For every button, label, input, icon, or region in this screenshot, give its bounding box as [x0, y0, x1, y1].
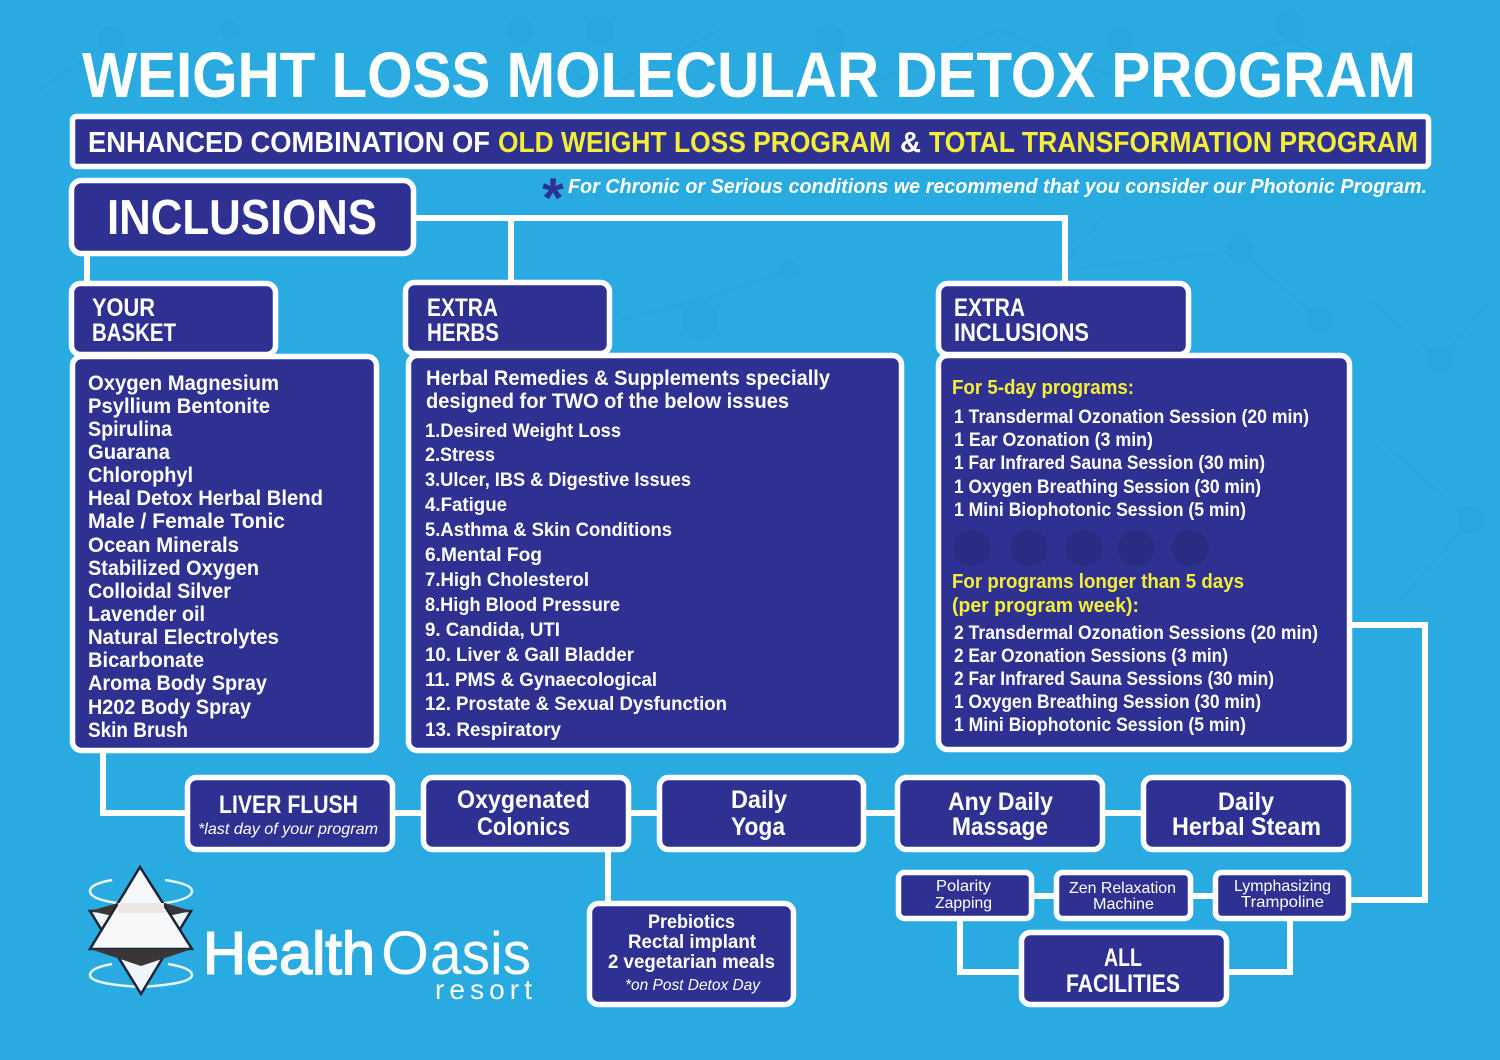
heading: extra inclusions [938, 284, 1188, 354]
panel: your basket list: Guarana [88, 441, 170, 464]
panel: extra herbs list: designed for TWO of the below issues [426, 390, 789, 413]
banner: & [900, 127, 921, 159]
box: any daily massage [898, 778, 1102, 850]
box: zen relaxation machine: Machine [1093, 896, 1154, 913]
panel: extra herbs list: 8.High Blood Pressure [425, 594, 620, 616]
box: daily yoga: Daily [731, 786, 787, 814]
box: oxygenated colonics [424, 778, 628, 850]
note: photonic program: For Chronic or Serious conditions we recommend that you consider our Photonic Program. [568, 176, 1427, 198]
heading: extra herbs: EXTRA [427, 294, 498, 322]
panel: your basket list: Skin Brush [88, 719, 188, 742]
heading: extra inclusions: INCLUSIONS [954, 319, 1089, 347]
panel: extra inclusions list: 1 Ear Ozonation (3 min) [954, 429, 1153, 451]
panel: your basket list: Male / Female Tonic [88, 510, 285, 533]
panel: extra inclusions list: For programs longer than 5 days [952, 571, 1244, 593]
box: liver flush: LIVER FLUSH [219, 791, 358, 819]
panel: your basket list: Stabilized Oxygen [88, 557, 259, 580]
panel: extra inclusions list: 2 Transdermal Ozonation Sessions (20 min) [954, 622, 1318, 644]
box: oxygenated colonics: Colonics [477, 813, 570, 841]
box: daily herbal steam: Herbal Steam [1172, 813, 1321, 841]
heading: inclusions [72, 180, 414, 254]
panel: extra inclusions list: 1 Mini Biophotonic Session (5 min) [954, 499, 1246, 521]
logo: Health Oasis resort: O [381, 919, 429, 987]
panel: extra herbs list: 1.Desired Weight Loss [425, 420, 621, 442]
box: prebiotics: Rectal implant [628, 932, 757, 953]
banner [72, 116, 1428, 166]
note: photonic program: * [542, 166, 564, 229]
note: photonic program [542, 166, 1427, 229]
box: all facilities: FACILITIES [1066, 970, 1180, 998]
panel: extra inclusions list: 1 Far Infrared Sauna Session (30 min) [954, 452, 1265, 474]
panel: extra inclusions list: 1 Transdermal Ozonation Session (20 min) [954, 406, 1309, 428]
panel: your basket list: Chlorophyl [88, 464, 193, 487]
panel: your basket list: H202 Body Spray [88, 696, 251, 719]
box: any daily massage: Any Daily [948, 788, 1053, 816]
panel: your basket list: Natural Electrolytes [88, 626, 279, 649]
panel: extra inclusions list: 1 Oxygen Breathing Session (30 min) [954, 691, 1261, 713]
icon: star logo [90, 867, 192, 994]
panel: your basket list: Lavender oil [88, 603, 205, 626]
panel: extra herbs list: 6.Mental Fog [425, 544, 542, 566]
box: daily yoga: Yoga [731, 813, 786, 841]
heading: extra herbs [406, 282, 610, 354]
panel: your basket list: Aroma Body Spray [88, 672, 267, 695]
panel: extra inclusions list: 2 Far Infrared Sauna Sessions (30 min) [954, 668, 1274, 690]
panel: extra herbs list: 12. Prostate & Sexual Dysfunction [425, 693, 727, 715]
panel: your basket list [72, 356, 376, 750]
heading: extra inclusions: EXTRA [954, 294, 1025, 322]
box: lymphasizing trampoline: Lymphasizing [1234, 878, 1331, 895]
box: liver flush: *last day of your program [198, 821, 378, 838]
panel: your basket list: Oxygen Magnesium [88, 372, 279, 395]
box: all facilities: ALL [1104, 944, 1142, 972]
box: any daily massage: Massage [952, 813, 1048, 841]
heading: extra herbs: HERBS [427, 319, 499, 347]
panel: extra inclusions list: For 5-day programs: [952, 377, 1134, 399]
box: daily herbal steam [1144, 778, 1348, 850]
banner: TOTAL TRANSFORMATION PROGRAM [929, 127, 1418, 159]
heading: your basket: YOUR [92, 294, 155, 322]
logo: Health Oasis resort: resort [435, 974, 532, 1005]
panel: extra herbs list: 5.Asthma & Skin Conditions [425, 519, 672, 541]
panel: extra inclusions list: 1 Oxygen Breathing Session (30 min) [954, 476, 1261, 498]
box: polarity zapping [898, 872, 1032, 918]
banner: OLD WEIGHT LOSS PROGRAM [498, 127, 891, 159]
box: lymphasizing trampoline [1216, 872, 1348, 918]
panel: your basket list: Bicarbonate [88, 649, 204, 672]
heading: inclusions: INCLUSIONS [107, 191, 377, 245]
panel: your basket list: Spirulina [88, 418, 172, 441]
logo: Health Oasis resort [90, 867, 532, 1005]
panel: extra herbs list: 2.Stress [425, 444, 495, 466]
panel: extra herbs list: 13. Respiratory [425, 719, 561, 741]
logo: Health Oasis resort: asis [430, 920, 531, 987]
panel: extra herbs list: 4.Fatigue [425, 494, 507, 516]
box: liver flush [188, 778, 392, 850]
panel: extra herbs list: 3.Ulcer, IBS & Digestive Issues [425, 469, 691, 491]
panel: extra inclusions list: 1 Mini Biophotonic Session (5 min) [954, 714, 1246, 736]
logo: Health Oasis resort: Health [203, 920, 375, 987]
heading: your basket [72, 284, 276, 354]
box: all facilities [1022, 932, 1226, 1004]
panel: your basket list: Colloidal Silver [88, 580, 231, 603]
box: daily yoga [660, 778, 864, 850]
panel: your basket list: Psyllium Bentonite [88, 395, 270, 418]
panel: extra herbs list [408, 356, 902, 750]
box: zen relaxation machine: Zen Relaxation [1069, 880, 1176, 897]
box: oxygenated colonics: Oxygenated [457, 786, 590, 814]
banner: ENHANCED COMBINATION OF [88, 127, 490, 159]
panel: extra herbs list: Herbal Remedies & Supplements specially [426, 367, 830, 390]
box: polarity zapping: Zapping [935, 895, 992, 912]
connector lines [87, 218, 1425, 972]
panel: extra inclusions list: 2 Ear Ozonation Sessions (3 min) [954, 645, 1228, 667]
panel: your basket list: Ocean Minerals [88, 534, 239, 557]
panel: your basket list: Heal Detox Herbal Blend [88, 487, 323, 510]
box: daily herbal steam: Daily [1218, 788, 1274, 816]
dots row [954, 530, 1208, 566]
panel: extra herbs list: 11. PMS & Gynaecological [425, 669, 657, 691]
panel: extra herbs list: 10. Liver & Gall Bladder [425, 644, 634, 666]
panel: extra inclusions list [938, 356, 1350, 750]
box: prebiotics [590, 904, 794, 1004]
box: prebiotics: 2 vegetarian meals [608, 952, 775, 973]
box: prebiotics: *on Post Detox Day [625, 977, 761, 994]
box: prebiotics: Prebiotics [648, 912, 735, 933]
box: polarity zapping: Polarity [936, 878, 991, 895]
panel: extra inclusions list: (per program week): [952, 595, 1139, 617]
panel: extra herbs list: 7.High Cholesterol [425, 569, 589, 591]
heading: your basket: BASKET [92, 319, 176, 347]
panel: extra herbs list: 9. Candida, UTI [425, 619, 560, 641]
box: lymphasizing trampoline: Trampoline [1241, 894, 1324, 911]
box: zen relaxation machine [1056, 872, 1190, 918]
